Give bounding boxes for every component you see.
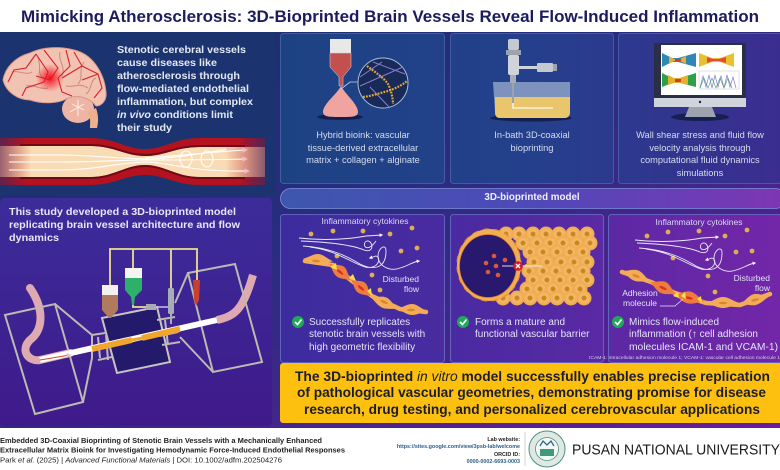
footer: citation: Extracellular Matrix Bioink for Investigating Hemodynamic Force-Induced Endothelial Responses [0, 446, 345, 454]
text: background: their study [117, 123, 172, 134]
red clamp [193, 280, 200, 306]
footer: lab links: ORCID ID: [494, 452, 520, 458]
text: hybrid bioink: Hybrid bioink: vascular [316, 130, 410, 140]
icon: beaker and nozzle [490, 39, 572, 122]
label: cytokines: Inflammatory cytokines [322, 216, 408, 226]
coaxial nozzle [146, 288, 174, 324]
text: in-bath printing: In-bath 3D-coaxial [494, 130, 570, 140]
diagram: bioprinting chamber [5, 249, 262, 414]
callout: conclusion: of pathological vascular geometries, demonstrating promise for disease [297, 385, 766, 400]
label: adhesion molecule [622, 288, 683, 308]
labels: disturbed flow [383, 274, 420, 294]
panel: inflammation [589, 214, 780, 362]
text: CFD simulation [636, 130, 764, 178]
disturbed flow lines [299, 235, 419, 269]
endothelial cell layer [303, 253, 427, 316]
finding text: Forms a mature and [475, 317, 565, 328]
panel: study model [0, 198, 272, 426]
text: background: in vivo conditions limit [117, 110, 234, 121]
labels: disturbed flow: Disturbed [734, 273, 770, 283]
footer: lab links [397, 437, 520, 465]
finding text [629, 317, 778, 353]
panel: background problem [0, 32, 275, 195]
syringe: green [125, 268, 142, 305]
text: CFD simulation: Wall shear stress and fluid flow [636, 130, 764, 140]
cytokine dots [309, 226, 419, 292]
arrow and blocked barrier [502, 261, 542, 271]
text: CFD simulation: velocity analysis through [649, 143, 751, 153]
disturbed flow lines [635, 237, 755, 271]
text: background: cause diseases like [117, 58, 217, 69]
labels: disturbed flow [734, 273, 771, 293]
text: study: replicating brain vessel architecture and flow [9, 220, 240, 231]
finding text: Successfully replicates [309, 317, 410, 328]
panel: replicates stenosis [280, 214, 444, 362]
icon: brain [3, 48, 106, 128]
text: background: Stenotic cerebral vessels [117, 45, 246, 56]
footer: citation [0, 436, 345, 464]
heading pill: 3D-bioprinted model: 3D-bioprinted model [484, 192, 580, 203]
text: study: This study developed a 3D-bioprinted model [9, 207, 236, 218]
finding text: inflammation (↑ cell adhesion [629, 329, 758, 340]
icon: check [457, 316, 469, 328]
icon: check [292, 316, 304, 328]
text: hybrid bioink [306, 130, 420, 165]
text: CFD simulation: computational fluid dynamics [640, 155, 760, 165]
vessel lumen [457, 229, 521, 301]
text: in-bath printing: bioprinting [511, 143, 553, 153]
cytokine dots [645, 228, 754, 294]
syringe: brown [102, 285, 118, 318]
callout: conclusion [280, 363, 780, 423]
label: adhesion molecule: molecule [623, 298, 657, 308]
diagram: stenotic vessel [0, 138, 265, 185]
footer: lab links: Lab website: [487, 437, 520, 443]
footnote: ICAM-1: intracellular adhesion molecule 1; VCAM-1: vascular cell adhesion molecule 1 [589, 355, 780, 360]
logo: university seal [529, 431, 565, 467]
finding text [475, 317, 590, 340]
panel: vascular barrier [450, 214, 604, 362]
endothelial cell layer [620, 265, 771, 309]
text: background: flow-mediated endothelial [117, 84, 249, 95]
finding text: Mimics flow-induced [629, 317, 719, 328]
text: background: inflammation, but complex [117, 97, 253, 108]
text: in-bath printing [494, 130, 570, 153]
footer: lab links: https://sites.google.com/view/3psb-lab/welcome [397, 444, 520, 450]
finding text: stenotic brain vessels with [309, 329, 425, 340]
callout: conclusion: research, drug testing, and personalized cerebrovascular applications [304, 402, 760, 417]
cell sheet [496, 226, 598, 306]
finding text: high geometric flexibility [309, 342, 415, 353]
footer: lab links: 0000-0002-6693-0003 [467, 459, 520, 465]
labels: disturbed flow: Disturbed [383, 274, 419, 284]
callout: conclusion: The 3D-bioprinted in vitro model successfully enables precise replication [295, 369, 770, 384]
title: Mimicking Atherosclerosis: 3D-Bioprinted Brain Vessels Reveal Flow-Induced Inflammation [21, 8, 759, 26]
footer: citation: Embedded 3D-Coaxial Bioprinting of Stenotic Brain Vessels with a Mechanically Enhanced [0, 436, 322, 445]
icon: bioink syringe and fibre network [317, 39, 408, 120]
icon: check [612, 316, 624, 328]
panel: hybrid bioink [280, 34, 444, 184]
text: study [9, 207, 240, 244]
labels: disturbed flow: flow [404, 284, 420, 294]
finding text [309, 317, 425, 353]
text: background: atherosclerosis through [117, 71, 240, 82]
yellow tubing [110, 249, 197, 307]
label: adhesion molecule: Adhesion [622, 288, 658, 298]
panel: CFD simulation [618, 34, 780, 184]
labels: disturbed flow: flow [755, 283, 771, 293]
text: background [117, 45, 253, 134]
finding text: functional vascular barrier [475, 329, 590, 340]
heading pill: 3D-bioprinted model [280, 188, 780, 208]
text: study: dynamics [9, 233, 59, 244]
text: hybrid bioink: matrix + collagen + alginate [306, 155, 420, 165]
label: cytokines: Inflammatory cytokines [656, 217, 742, 227]
icon: monitor with simulations [654, 43, 746, 121]
panel: in-bath printing [450, 34, 614, 184]
finding text: molecules ICAM-1 and VCAM-1) [629, 342, 778, 353]
text: CFD simulation: simulations [677, 168, 724, 178]
divider [524, 432, 526, 466]
footer: citation: Park et al. (2025) | Advanced Functional Materials | DOI: 10.1002/adfm.202504276 [0, 456, 282, 464]
text: hybrid bioink: tissue-derived extracellular [308, 143, 418, 153]
